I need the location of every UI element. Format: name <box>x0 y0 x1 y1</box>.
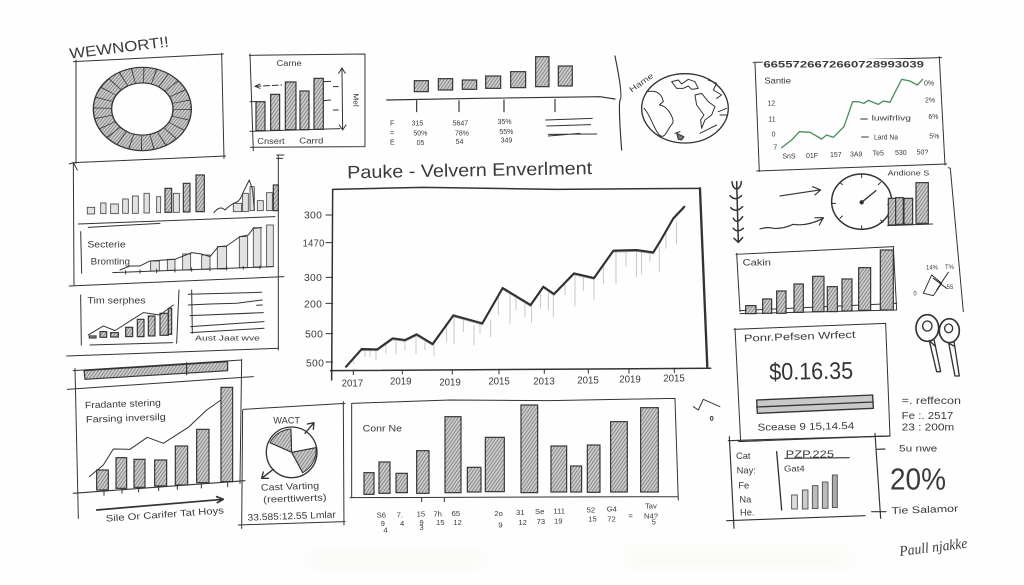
panel: Conr Ne bar chart <box>350 398 720 535</box>
axis labels: Carrd <box>299 136 323 145</box>
y axis labels: 1470 <box>303 239 325 250</box>
chart: middle area bars <box>113 225 273 274</box>
y axis labels <box>767 101 777 151</box>
header bar <box>84 362 228 379</box>
heading: Ponr.Pefsen Wrfect <box>744 330 856 345</box>
y axis labels: 300 <box>304 210 322 221</box>
table of values: 55% <box>499 129 513 136</box>
x axis labels: 530 <box>895 150 907 157</box>
icon: plant stem <box>730 182 743 242</box>
panel frame <box>753 57 947 172</box>
bars <box>746 250 893 314</box>
text block: reffecon notes: 23 : 200m <box>902 423 954 434</box>
icon: gauge <box>832 174 892 229</box>
table of values: = <box>390 130 394 137</box>
y axis labels <box>303 210 333 370</box>
y axis labels: 11 <box>768 117 776 124</box>
mini bars <box>792 475 837 509</box>
chart: line rows <box>188 290 264 343</box>
x axis labels: 2019 <box>619 375 641 386</box>
axis labels: 7. <box>397 510 403 519</box>
icon: small radar sketch <box>913 265 955 298</box>
axis labels <box>377 501 658 535</box>
icon: small radar sketch: 14% <box>926 266 939 272</box>
axis labels: 19 <box>554 516 563 525</box>
panel frame <box>67 359 253 518</box>
axis labels: 73 <box>537 517 545 526</box>
legend <box>861 114 911 141</box>
arrow <box>97 497 223 510</box>
title: Pauke - Velvern Enverlment <box>347 158 592 182</box>
caption: Sile Or Carifer Tat Hoys <box>105 505 225 524</box>
right edge <box>948 168 963 312</box>
x axis labels: 2017 <box>342 379 363 390</box>
axis labels: 9 <box>381 519 385 528</box>
row labels <box>736 451 756 518</box>
x axis labels: 2019 <box>439 378 461 389</box>
icon: small radar sketch: 0 <box>913 292 917 298</box>
right labels <box>924 81 939 140</box>
axis labels: 15 <box>436 518 445 527</box>
value: $0.16.35 <box>769 358 853 386</box>
table of values: E <box>390 139 395 146</box>
table of values: F <box>390 121 394 128</box>
text: Secterie Bromting: Bromting <box>91 256 130 266</box>
icon: small radar sketch: 55 <box>947 285 954 291</box>
pie chart <box>266 427 317 478</box>
text block: reffecon notes <box>902 396 961 434</box>
right labels: 5% <box>929 133 939 140</box>
y axis labels: 0 <box>772 131 776 138</box>
icon: small radar sketch: T% <box>945 265 955 271</box>
y axis labels: 500 <box>305 329 323 340</box>
axis labels: S6 <box>377 510 386 519</box>
axis labels: 12 <box>518 518 527 527</box>
caption: Scease 9 15,14.54 <box>758 421 855 434</box>
text: Secterie Bromting: Secterie <box>87 239 126 249</box>
bars <box>414 57 572 92</box>
table of values: 54 <box>456 139 464 146</box>
panel: Carne bar chart <box>249 54 365 151</box>
table of values: 349 <box>501 138 512 145</box>
dashed arrow <box>255 84 282 88</box>
y axis labels: 7 <box>773 144 777 151</box>
right thick edge <box>700 188 707 367</box>
chart: line rows: Aust Jaat wve <box>195 336 260 343</box>
x axis labels <box>342 369 685 390</box>
axis labels: 31 <box>516 508 525 517</box>
caption <box>247 481 336 523</box>
x axis labels: 2015 <box>577 375 599 386</box>
axis labels: 9 <box>419 518 424 527</box>
axis labels: Cnsert <box>257 137 286 146</box>
bars <box>888 183 933 226</box>
label: Carne: Carne <box>277 59 302 68</box>
label: WACT: WACT <box>273 415 300 425</box>
right labels: 6% <box>928 114 938 121</box>
heading: WEWNORT: WEWNORT!! <box>69 35 170 63</box>
axis labels: Tav <box>645 501 657 510</box>
panel frame <box>73 53 226 163</box>
axis labels: = <box>628 511 633 520</box>
panel frame <box>727 433 890 528</box>
axis labels: 12 <box>453 518 462 527</box>
label: Conr Ne <box>363 424 402 434</box>
chart frame <box>331 187 711 380</box>
chart: bars and trend <box>73 387 245 495</box>
caption: Cast Varting <box>261 481 319 493</box>
x axis labels: Te5 <box>873 151 884 158</box>
row labels: Na <box>739 494 752 504</box>
x axis labels: 2015 <box>488 377 510 388</box>
axis labels: 9 <box>498 520 503 529</box>
axis <box>387 97 615 112</box>
panel: Fradante bar and line chart <box>67 359 253 524</box>
row labels: Nay: <box>737 465 756 475</box>
text block: reffecon notes: =. reffecon <box>902 396 961 407</box>
panel: 20 percent stat <box>890 444 959 517</box>
icon: segmented donut <box>93 67 191 151</box>
axis labels: 52 <box>587 506 595 515</box>
value: 20%: 20% <box>890 462 946 496</box>
caption: (reerttiwerts) <box>263 492 327 505</box>
panel: left stacked charts <box>67 155 284 356</box>
label: Tie Salamor: Tie Salamor <box>891 504 959 517</box>
label: Cakin: Cakin <box>743 258 771 268</box>
axis labels: 2o <box>494 509 503 518</box>
row labels: He. <box>740 508 755 518</box>
right labels: 2% <box>925 97 935 104</box>
progress bar <box>757 395 873 413</box>
axis labels: 111 <box>553 506 565 515</box>
panel: main line chart <box>303 158 711 390</box>
x axis labels: 3A9 <box>850 151 863 158</box>
axis labels: 7h <box>433 510 442 519</box>
axis labels: 72 <box>607 515 616 524</box>
table of values: 35% <box>498 119 512 126</box>
panel frame <box>249 54 365 151</box>
panel: donut with heading <box>69 35 226 163</box>
icon: squiggle mark <box>693 399 720 420</box>
right labels: 0% <box>924 81 934 88</box>
curved divider <box>615 56 622 150</box>
legend: luwifrlivg <box>872 114 911 123</box>
bars <box>364 405 658 502</box>
text: Fradante stering: Farsing inversilg <box>86 412 166 425</box>
panel: gauge and arrows <box>730 168 963 312</box>
panel: Cakin bar chart <box>736 247 955 314</box>
panel: Santie line chart: 6655726672660728993039 <box>763 60 924 70</box>
axis labels: 4 <box>400 519 405 528</box>
table of values <box>390 119 513 147</box>
row labels: Cat <box>736 451 751 461</box>
legend: Lard Na <box>874 132 899 141</box>
arrows <box>262 423 314 478</box>
row labels: Fe <box>738 480 749 490</box>
icon: globe <box>642 74 728 143</box>
axis labels: 4 <box>383 526 388 535</box>
panel frame <box>238 402 345 528</box>
text: Secterie Bromting <box>81 232 130 273</box>
axis labels <box>257 136 323 146</box>
arrows <box>760 187 823 229</box>
panel frame <box>736 247 897 314</box>
panel frame <box>734 323 890 442</box>
text block: reffecon notes: Fe :. 2517 <box>902 411 953 422</box>
chart: top bars <box>78 175 278 227</box>
heading: PZP.225: PZP.225 <box>786 449 834 460</box>
table of values: 315 <box>412 121 423 128</box>
x axis labels <box>782 149 928 160</box>
table of values: 05 <box>417 140 425 147</box>
axis labels: 3 <box>419 523 424 532</box>
axis labels: 5 <box>652 517 656 526</box>
table of values: 5647 <box>453 120 468 127</box>
panel: Ponr Pefsen value card <box>734 323 890 442</box>
table of values: 78% <box>455 130 469 137</box>
green line <box>782 79 923 148</box>
signature: Paull njakke <box>898 536 969 560</box>
legend lines <box>546 118 597 136</box>
label: Sunwe: 5u nwe <box>899 444 937 454</box>
text: Tim serphes: Tim serphes <box>87 295 146 305</box>
drop lines <box>353 222 677 363</box>
axis labels: Se <box>535 507 544 516</box>
trend line <box>346 207 684 368</box>
panel: WACT pie chart <box>238 402 345 528</box>
icon: keys <box>916 315 959 376</box>
panel: top bars and table <box>387 56 728 150</box>
panel frame <box>350 398 678 500</box>
label: Santie: Santie <box>764 77 792 86</box>
y axis labels: 200 <box>304 299 322 310</box>
axis labels: 65 <box>452 509 460 518</box>
x axis labels: 157 <box>830 152 842 159</box>
y axis labels: 300 <box>304 273 322 284</box>
table of values: 50% <box>413 131 427 138</box>
x axis labels: 2013 <box>533 377 555 388</box>
text: Fradante stering: Fradante stering <box>85 398 161 410</box>
text: Fradante stering <box>85 398 166 425</box>
heading: PZP.225: Gat4 <box>784 464 805 473</box>
label: Home: Hame <box>628 71 656 94</box>
text: Tim serphes <box>81 295 146 345</box>
icon: vertical range arrows: Mel <box>351 93 360 107</box>
caption: 33.585:12.55 Lmlar <box>247 510 336 523</box>
axis labels: N4? <box>644 511 658 520</box>
number header <box>763 59 926 70</box>
chart: small bars with line <box>88 290 179 345</box>
panel: Santie line chart <box>753 57 947 172</box>
x axis labels: 50? <box>917 149 928 156</box>
divider <box>777 452 782 510</box>
x axis labels: 2015 <box>663 374 685 385</box>
x axis labels: SnS <box>782 153 796 160</box>
axis labels: G4 <box>607 504 618 513</box>
axis labels: 15 <box>588 515 597 524</box>
panel: Cat table with mini bars <box>727 433 890 528</box>
label: Andione S: Andione S <box>888 168 929 177</box>
axis labels: 15 <box>417 510 425 519</box>
bars <box>250 78 340 131</box>
x axis labels: 01F <box>806 153 818 160</box>
x axis labels: 2019 <box>390 377 411 388</box>
y axis labels: 12 <box>767 101 775 108</box>
y axis labels: 500 <box>306 359 324 370</box>
panel frame <box>67 155 284 356</box>
heading: PZP.225 <box>784 449 849 473</box>
